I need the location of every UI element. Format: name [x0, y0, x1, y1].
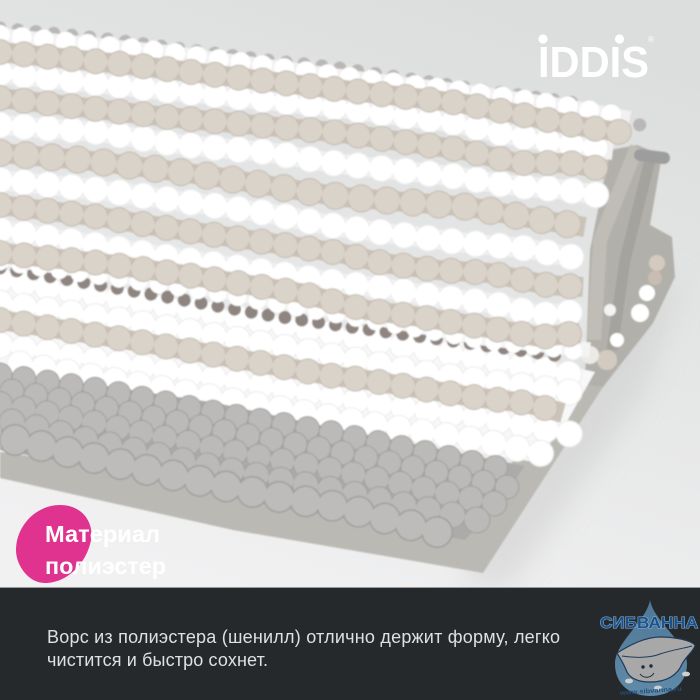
row 8 beige [0, 205, 583, 287]
water drop [615, 600, 687, 696]
row 6 beige [0, 153, 585, 227]
roll-end binding folds [594, 147, 664, 350]
lower mat: white band upper [0, 280, 585, 394]
tub rim line [622, 646, 692, 657]
description text: чистится и быстро сохнет. [47, 650, 268, 670]
roll: top grey back row [0, 28, 640, 125]
lower mat: beige band [0, 320, 563, 413]
mascot face [640, 664, 654, 677]
watermark logo: Sibvanna [600, 600, 698, 697]
pink blob [16, 505, 91, 583]
badge: material [16, 505, 166, 583]
peeking pompoms at the roll end [581, 255, 665, 370]
row 2 beige [0, 52, 620, 132]
grey pompom block [0, 373, 525, 540]
row 5 white [0, 125, 597, 195]
lower mat white base [0, 272, 595, 462]
logo name: СИБВАННА [600, 615, 698, 632]
row 3 white [0, 73, 613, 150]
roll: white edge under beige [0, 258, 590, 353]
soft shadow under mat [460, 270, 685, 585]
row 7 white [0, 180, 577, 258]
badge text: полиэстер [45, 553, 166, 579]
mascot feet [625, 672, 690, 690]
logo: IDDIS: ® [648, 35, 654, 44]
roll: white rows [0, 35, 630, 315]
description text [47, 627, 560, 670]
photo: rolled bath mat [0, 28, 685, 585]
bathtub mascot [617, 637, 695, 682]
bottom dark panel [0, 587, 700, 700]
mat binding edge [0, 300, 653, 573]
description text: Ворс из полиэстера (шенилл) отлично держит форму, легко [47, 627, 560, 647]
roll: beige rows [0, 52, 620, 337]
row 10 beige [0, 253, 580, 337]
row 4 beige [0, 98, 607, 170]
roll: dark shadow row [0, 268, 560, 356]
row 1 white [0, 35, 630, 118]
logo: IDDIS: IDDIS [538, 38, 649, 87]
logo url: www.sibvanna.ru [618, 686, 682, 697]
lower mat: white band lower [0, 345, 570, 455]
roll-end binding [585, 145, 675, 387]
badge text: Материал [45, 521, 160, 547]
badge text [45, 521, 166, 579]
row 9 white [0, 230, 577, 315]
